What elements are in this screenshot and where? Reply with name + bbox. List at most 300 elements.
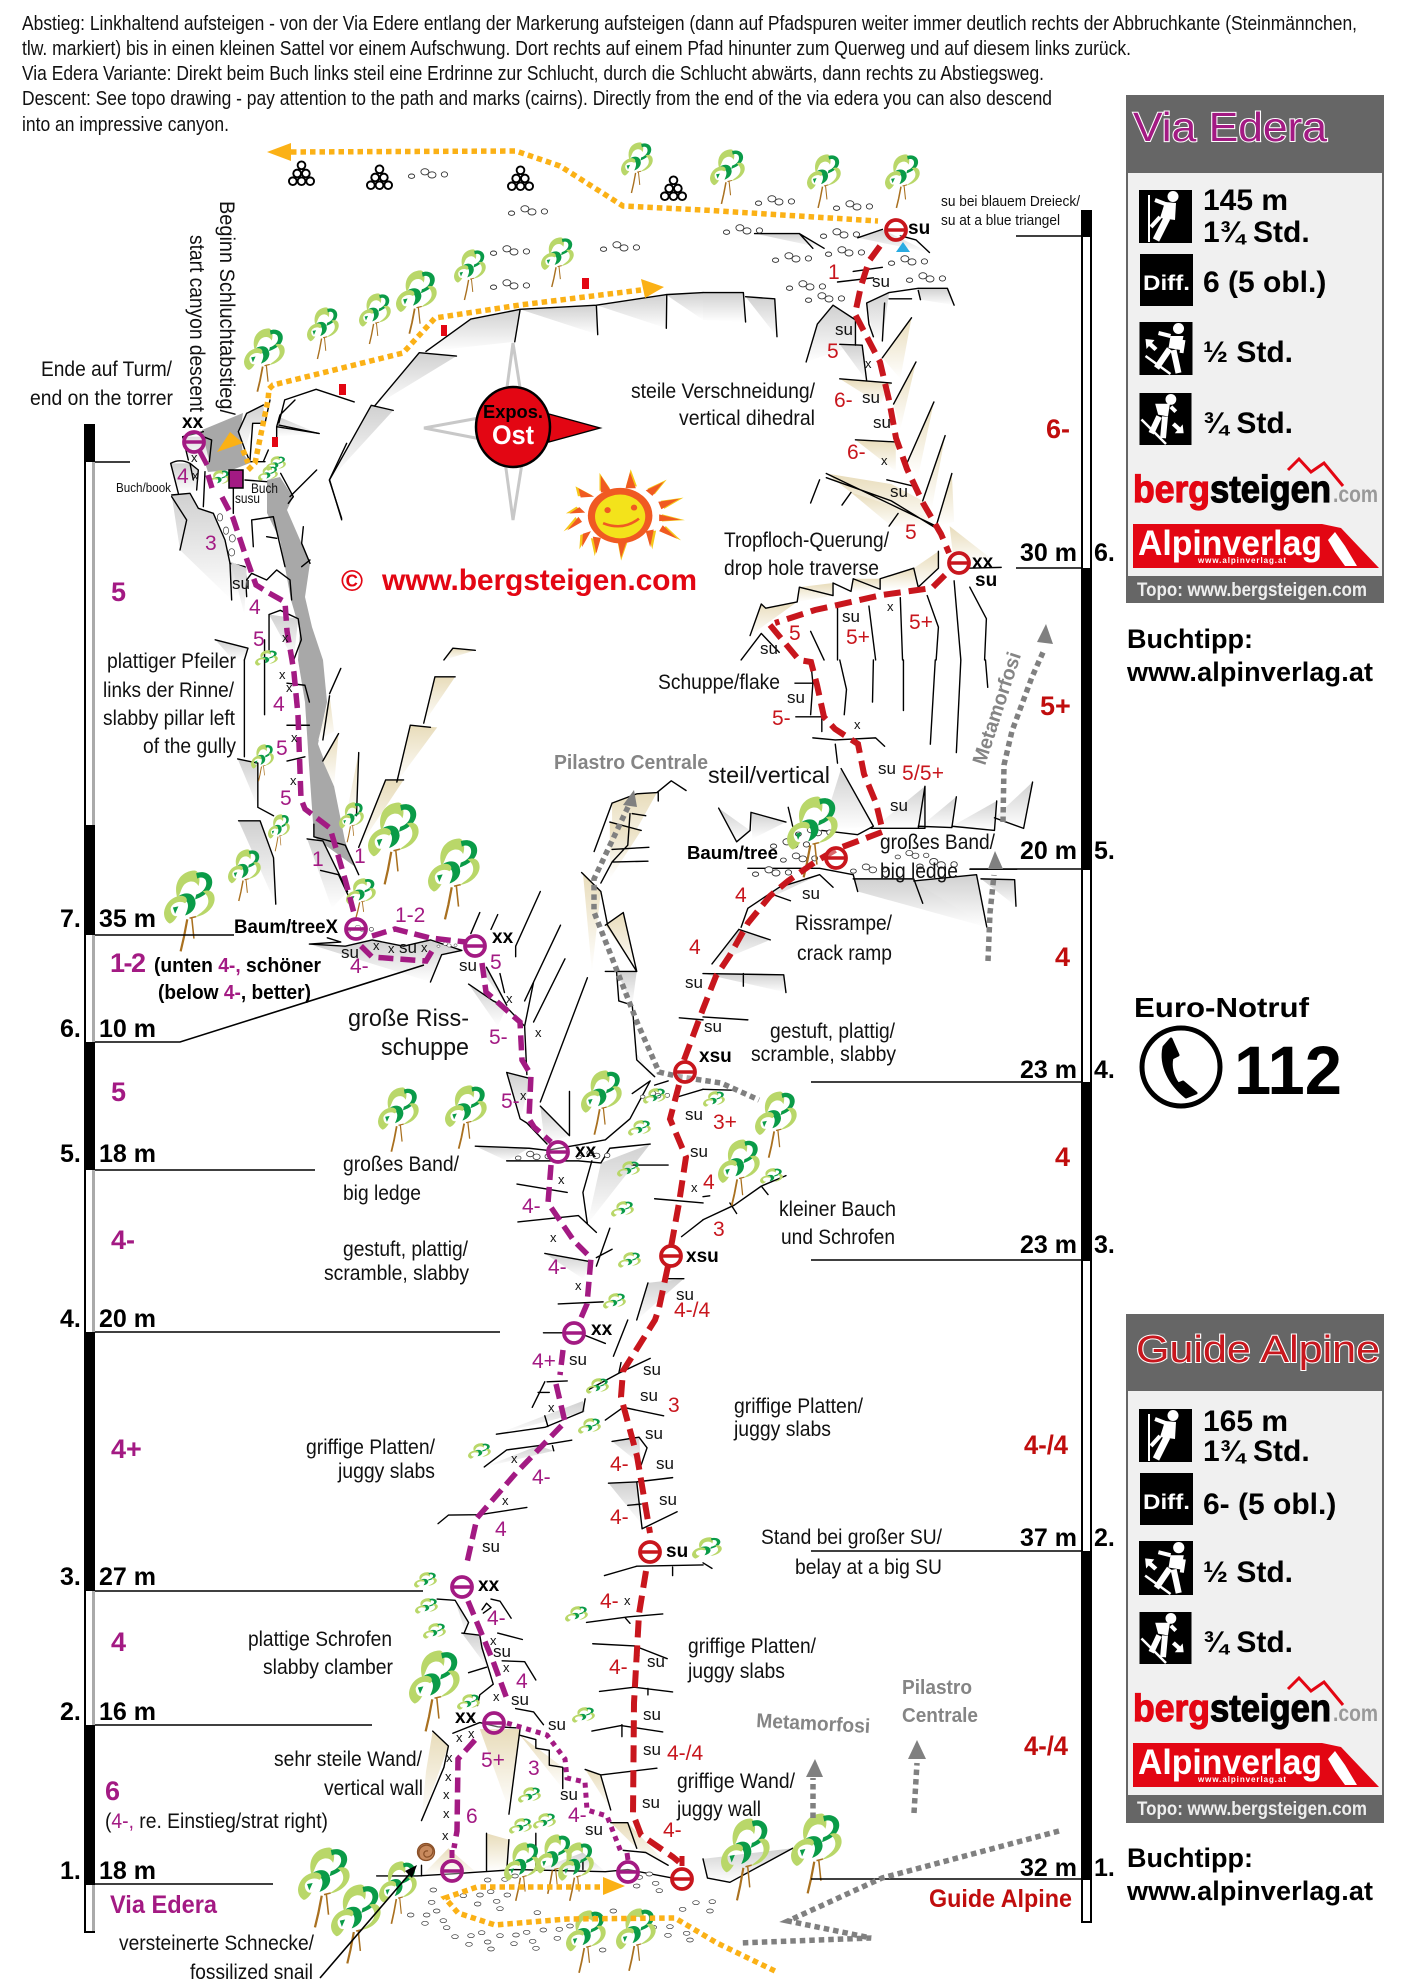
bold annotations: xx	[492, 927, 514, 948]
grade labels on route: Guide Alpine: 3	[668, 1394, 680, 1417]
su and bolt labels: x	[388, 941, 395, 956]
description labels: scramble, slabby	[324, 1262, 469, 1285]
right scale: pitch grades: 4-/4	[1024, 1731, 1068, 1761]
description labels: end on the torrer	[30, 387, 173, 410]
su and bolt labels: su	[643, 1740, 661, 1759]
grade labels on route: Via Edera	[177, 465, 587, 1828]
su and bolt labels: su	[685, 973, 703, 992]
su and bolt labels: su	[482, 1537, 500, 1556]
grade labels on route: Guide Alpine	[600, 261, 944, 1842]
grade labels on route: Via Edera: 3	[205, 532, 217, 555]
logo: Alpinverlag: Alpinverlag	[1138, 524, 1322, 563]
su and bolt labels: su	[890, 796, 908, 815]
grey neighbouring route names: Metamorfosi	[756, 1710, 871, 1738]
bold annotations: su	[975, 570, 997, 591]
su and bolt labels: x	[442, 1828, 449, 1843]
icon: difficulty	[1140, 1473, 1193, 1525]
difficulty value: 6 (5 obl.)	[1203, 266, 1326, 299]
icon: climbing	[1139, 190, 1192, 243]
su and bolt labels: x	[421, 940, 428, 955]
left scale: pitch grades: 5	[111, 577, 126, 607]
small bushes	[208, 456, 783, 1834]
description labels: große Riss-	[348, 1005, 469, 1032]
bold annotations: xx	[972, 552, 994, 573]
grade labels on route: Via Edera: 4	[249, 596, 261, 619]
rock drawing: upper left	[215, 293, 703, 660]
su and bolt labels: x	[520, 1088, 527, 1103]
vertical descent label: start canyon descent	[185, 235, 208, 412]
bold annotations: Baum/tree	[687, 843, 778, 863]
su and bolt labels	[191, 272, 908, 1843]
su and bolt labels: x	[502, 1493, 509, 1508]
length and climbing time: 145 m	[1203, 184, 1288, 217]
description labels: steil/vertical	[708, 762, 830, 788]
right scale: pitch lengths and numbers: 3.	[1094, 1231, 1115, 1259]
su and bolt labels: su	[760, 639, 778, 658]
left scale: pitch grades: 4+	[111, 1434, 142, 1464]
grade labels on route: Guide Alpine: 5-	[772, 707, 791, 730]
description labels: scramble, slabby	[751, 1043, 896, 1066]
bold annotations: xx	[182, 412, 204, 433]
su and bolt labels: su	[560, 1785, 578, 1804]
left scale: pitch numbers and lengths: 18 m	[99, 1857, 156, 1885]
logo: bergsteigen.com: berg	[1133, 1688, 1210, 1730]
copyright line: ©	[341, 565, 363, 598]
bold annotations: xx	[575, 1141, 597, 1162]
grade labels on route: Guide Alpine: 4	[689, 936, 701, 959]
icon: difficulty: Diff.	[1143, 1491, 1190, 1514]
bold annotations: xsu	[699, 1046, 732, 1067]
left scale: pitch grades: 1-2	[110, 948, 146, 978]
difficulty value: 6- (5 obl.)	[1203, 1488, 1336, 1521]
description labels: steile Verschneidung/	[631, 380, 815, 403]
logo: bergsteigen.com: .com	[1333, 1700, 1378, 1726]
left scale: pitch numbers and lengths: 10 m	[99, 1015, 156, 1043]
grade labels on route: Guide Alpine: 4-	[609, 1656, 628, 1679]
bold annotations: su	[666, 1541, 688, 1562]
description labels: plattige Schrofen	[248, 1628, 392, 1651]
description labels: gestuft, plattig/	[770, 1020, 895, 1043]
icon: difficulty	[1140, 254, 1193, 306]
icon: fossil snail with pointer arrow	[320, 1844, 434, 1978]
grade labels on route: Via Edera: 4-	[487, 1607, 506, 1630]
rotated grey route name: Metamorfosi	[969, 649, 1026, 768]
book tip: Via Edera panel	[1126, 624, 1373, 687]
panel: Guide Alpine facts	[1126, 1314, 1384, 1823]
grade labels on route: Via Edera: 4-	[532, 1466, 551, 1489]
su and bolt labels: x	[865, 356, 872, 371]
su and bolt labels: su	[659, 1490, 677, 1509]
su and bolt labels: su	[232, 574, 250, 593]
title: Guide Alpine: Guide Alpine	[1136, 1329, 1380, 1371]
grade labels on route: Via Edera: 4-	[522, 1195, 541, 1218]
length and climbing time: 1¾ Std.	[1203, 1435, 1310, 1468]
su and bolt labels: x	[881, 453, 888, 468]
left scale: pitch numbers and lengths: 18 m	[99, 1140, 156, 1168]
grey neighbouring route names	[554, 752, 978, 1738]
su and bolt labels: su	[890, 482, 908, 501]
su and bolt labels: x	[291, 730, 298, 745]
su and bolt labels: x	[290, 773, 297, 788]
logo: Alpinverlag: www.alpinverlag.at	[1197, 1775, 1286, 1784]
grade labels on route: Guide Alpine: 3	[713, 1218, 725, 1241]
description labels: vertical dihedral	[679, 407, 815, 430]
description labels: belay at a big SU	[795, 1556, 942, 1579]
description labels: juggy slabs	[733, 1418, 831, 1441]
grade labels on route: Via Edera: 5	[276, 737, 288, 760]
pebbles below the wall	[407, 1872, 716, 1952]
right scale: pitch grades: 4	[1055, 942, 1070, 972]
su and bolt labels: x	[446, 1750, 453, 1765]
grade labels on route: Via Edera: 1	[312, 848, 324, 871]
left scale: pitch numbers and lengths	[60, 905, 156, 1885]
logo: Alpinverlag: www.alpinverlag.at	[1197, 556, 1286, 565]
copyright line: www.bergsteigen.com	[381, 564, 697, 597]
right scale: pitch lengths and numbers: 37 m	[1020, 1524, 1077, 1552]
description labels: sehr steile Wand/	[274, 1748, 422, 1771]
su and bolt labels: su	[873, 413, 891, 432]
grade labels on route: Via Edera: 5	[253, 628, 265, 651]
red route markers	[272, 278, 589, 447]
grade labels on route: Via Edera: 5	[280, 787, 292, 810]
logo: bergsteigen.com: steigen	[1210, 469, 1331, 511]
su and bolt labels: su	[399, 938, 417, 957]
su and bolt labels: x	[456, 1730, 463, 1745]
left scale: pitch numbers and lengths: 7.	[60, 905, 81, 933]
trees	[164, 142, 920, 1973]
grade labels on route: Guide Alpine: 6-	[847, 441, 866, 464]
left scale: pitch numbers and lengths: 16 m	[99, 1698, 156, 1726]
su and bolt labels: su	[842, 607, 860, 626]
right scale: pitch lengths and numbers: 23 m	[1020, 1056, 1077, 1084]
right scale: pitch grades: 6-	[1046, 414, 1070, 444]
compass: exposition east: Ost	[492, 420, 534, 450]
description labels: griffige Platten/	[688, 1635, 816, 1658]
description labels: links der Rinne/	[103, 679, 234, 702]
su and bolt labels: x	[443, 1806, 450, 1821]
grade labels on route: Guide Alpine: 4-/4	[674, 1299, 711, 1322]
su and bolt labels: x	[192, 468, 199, 483]
su and bolt labels: su	[685, 1105, 703, 1124]
left scale: pitch grades: 4	[111, 1627, 126, 1657]
left pitch scale bar	[84, 424, 500, 1933]
right scale: pitch grades: 4-/4	[1024, 1430, 1068, 1460]
su and bolt labels: x	[373, 938, 380, 953]
grade labels on route: Via Edera: 4+	[532, 1350, 556, 1373]
icon: ascent on foot	[1140, 322, 1192, 375]
right scale: pitch lengths and numbers: 30 m	[1020, 539, 1077, 567]
left scale: pitch numbers and lengths: 20 m	[99, 1305, 156, 1333]
grade labels on route: Guide Alpine: 5	[905, 521, 917, 544]
route line: Via Edera	[199, 450, 628, 1860]
description labels: slabby pillar left	[103, 707, 235, 730]
su and bolt labels: x	[503, 1660, 510, 1675]
bold annotations: Baum/treeX	[234, 917, 338, 938]
description labels: su at a blue triangel	[941, 212, 1060, 229]
description labels: griffige Wand/	[677, 1770, 795, 1793]
grade labels on route: Via Edera: 4	[495, 1518, 507, 1541]
book tip: Guide Alpine panel: Buchtipp:	[1127, 1843, 1253, 1873]
su and bolt labels: x	[443, 1787, 450, 1802]
su and bolt labels: x	[506, 991, 513, 1006]
su and bolt labels: x	[548, 1400, 555, 1415]
left scale: pitch numbers and lengths: 2.	[60, 1698, 81, 1726]
grade labels on route: Guide Alpine: 4-/4	[667, 1742, 704, 1765]
rock drawing: upper right	[703, 229, 1001, 660]
icon: blue triangle at start	[896, 242, 910, 252]
description labels: schuppe	[381, 1034, 469, 1061]
description labels: big ledge	[343, 1182, 421, 1205]
su and bolt labels: x	[445, 1769, 452, 1784]
cairns	[289, 161, 686, 200]
descent description text: into an impressive canyon.	[22, 114, 229, 136]
grade labels on route: Guide Alpine: 5+	[846, 626, 870, 649]
description labels: susu	[235, 490, 260, 506]
su and bolt labels: x	[490, 1633, 497, 1648]
descent time: ¾ Std.	[1203, 407, 1293, 440]
grade labels on route: Guide Alpine: 3+	[713, 1111, 737, 1134]
su and bolt labels: x	[286, 680, 293, 695]
rock gully	[202, 413, 354, 866]
left scale: pitch grades: 4-	[111, 1225, 135, 1255]
left scale: pitch numbers and lengths: 3.	[60, 1563, 81, 1591]
icon: ascent on foot	[1139, 1541, 1193, 1595]
rock drawing: lower right	[703, 1563, 793, 1882]
logo: bergsteigen.com: .com	[1333, 481, 1378, 507]
icon: descent on foot	[1140, 1612, 1192, 1664]
logo: Alpinverlag	[1133, 1743, 1379, 1787]
su and bolt labels: x	[282, 630, 289, 645]
description labels: Ende auf Turm/	[41, 358, 172, 381]
grade labels on route: Via Edera: 4	[273, 693, 285, 716]
su and bolt labels: su	[656, 1454, 674, 1473]
right pitch scale bar	[811, 210, 1092, 1923]
grade labels on route: Via Edera: 4-	[548, 1256, 567, 1279]
descent description text: tlw. markiert) bis in einen kleinen Sattel vor einem Aufschwung. Dort rechts auf einem Pfad hinunter zum Querweg und auf diesem links zurück.	[22, 38, 1131, 60]
length and climbing time: 1¾ Std.	[1203, 216, 1310, 249]
bold annotations: xx	[478, 1575, 500, 1596]
descent time: ¾ Std.	[1203, 1626, 1293, 1659]
left scale: pitch grades: 5	[111, 1077, 126, 1107]
compass: exposition east: Expos.	[483, 402, 543, 422]
neighbouring routes, grey dotted	[594, 624, 1059, 1943]
length and climbing time	[1203, 1405, 1310, 1468]
su and bolt labels: su	[341, 943, 359, 962]
left scale: pitch grades: 6	[105, 1776, 120, 1806]
right scale: pitch grades: 5+	[1040, 691, 1071, 721]
rock drawing: middle right	[703, 660, 1033, 1220]
description labels: griffige Platten/	[734, 1395, 863, 1418]
su and bolt labels: su	[690, 1142, 708, 1161]
su and bolt labels: su	[642, 1793, 660, 1812]
description labels: of the gully	[143, 735, 236, 758]
bold annotations: (below 4-, better)	[158, 982, 311, 1004]
su and bolt labels: x	[854, 717, 861, 732]
bold annotations: (unten 4-, schöner	[154, 955, 321, 977]
book tip: Guide Alpine panel: www.alpinverlag.at	[1126, 1876, 1373, 1906]
topo credit: Topo: www.bergsteigen.com	[1137, 1799, 1367, 1820]
logo: bergsteigen.com	[1133, 1678, 1378, 1730]
description labels: Buch/book	[116, 480, 171, 495]
left scale: pitch numbers and lengths: 35 m	[99, 905, 156, 933]
grade labels on route: Via Edera: 5+	[481, 1749, 505, 1772]
euro emergency call	[1134, 992, 1342, 1109]
logo: bergsteigen.com	[1133, 459, 1378, 511]
grade labels on route: Guide Alpine: 4-	[610, 1506, 629, 1529]
grade labels on route: Via Edera: 4	[177, 465, 189, 488]
su and bolt labels: x	[887, 599, 894, 614]
description labels: big ledge	[880, 860, 958, 883]
description labels: griffige Platten/	[306, 1436, 435, 1459]
icon: summit book	[229, 470, 243, 488]
icon: difficulty: Diff.	[1143, 272, 1190, 295]
su and bolt labels: su	[643, 1705, 661, 1724]
su and bolt labels: su	[645, 1424, 663, 1443]
su and bolt labels: su	[640, 1386, 658, 1405]
length and climbing time: 165 m	[1203, 1405, 1288, 1438]
scree pebbles	[346, 169, 957, 1160]
grade labels on route: Guide Alpine: 5+	[909, 611, 933, 634]
book tip: Via Edera panel: www.alpinverlag.at	[1126, 657, 1373, 687]
right scale: pitch lengths and numbers: 23 m	[1020, 1231, 1077, 1259]
approach time: ½ Std.	[1203, 1556, 1293, 1589]
topo credit: Topo: www.bergsteigen.com	[1137, 580, 1367, 601]
description labels: juggy slabs	[337, 1460, 435, 1483]
grade labels on route: Guide Alpine: 4	[735, 884, 747, 907]
grade labels on route: Guide Alpine: 4	[703, 1171, 715, 1194]
su and bolt labels: su	[802, 884, 820, 903]
description labels: großes Band/	[880, 831, 995, 854]
description labels: slabby clamber	[263, 1656, 393, 1679]
su and bolt labels: su	[643, 1360, 661, 1379]
su and bolt labels: x	[624, 1593, 631, 1608]
su and bolt labels: su	[569, 1350, 587, 1369]
descent description text	[22, 13, 1357, 136]
su and bolt labels: su	[493, 1642, 511, 1661]
grade labels on route: Via Edera: 4	[516, 1670, 528, 1693]
su and bolt labels: x	[550, 1230, 557, 1245]
left scale: pitch grades	[105, 577, 218, 1919]
grade labels on route: Via Edera: 5-	[489, 1026, 508, 1049]
icon: climbing	[1139, 1409, 1192, 1462]
left scale: pitch numbers and lengths: 6.	[60, 1015, 81, 1043]
right scale: pitch lengths and numbers: 1.	[1094, 1854, 1115, 1882]
left scale: pitch numbers and lengths: 5.	[60, 1140, 81, 1168]
description labels: großes Band/	[343, 1153, 459, 1176]
right scale: pitch lengths and numbers: 6.	[1094, 539, 1115, 567]
description labels: drop hole traverse	[724, 557, 879, 580]
grade labels on route: Guide Alpine: 6-	[834, 389, 853, 412]
description labels: vertical wall	[324, 1777, 423, 1800]
su and bolt labels: su	[548, 1715, 566, 1734]
rock drawing: lower left	[377, 1320, 703, 1878]
description labels: gestuft, plattig/	[343, 1238, 468, 1261]
title: Via Edera: Via Edera	[1133, 104, 1327, 150]
su and bolt labels: su	[676, 1285, 694, 1304]
su and bolt labels: su	[787, 688, 805, 707]
su and bolt labels: su	[647, 1652, 665, 1671]
left scale: pitch numbers and lengths: 4.	[60, 1305, 81, 1333]
belay stations	[184, 220, 969, 1889]
grade labels on route: Guide Alpine: 1	[828, 261, 840, 284]
right scale: pitch grades: 4	[1055, 1142, 1070, 1172]
su and bolt labels: x	[279, 667, 286, 682]
description labels: juggy slabs	[687, 1660, 785, 1683]
su and bolt labels: su	[704, 1017, 722, 1036]
su and bolt labels: x	[691, 1180, 698, 1195]
grade labels on route: Via Edera: 4-	[568, 1804, 587, 1827]
su and bolt labels: x	[575, 1278, 582, 1293]
su and bolt labels: su	[585, 1820, 603, 1839]
su and bolt labels: su	[835, 320, 853, 339]
su and bolt labels: su	[878, 759, 896, 778]
description labels: versteinerte Schnecke/	[119, 1932, 314, 1955]
description labels: su bei blauem Dreieck/	[941, 193, 1081, 210]
right scale: pitch grades: Guide Alpine	[929, 1885, 1072, 1913]
description labels: kleiner Bauch	[779, 1198, 896, 1221]
right scale: pitch lengths and numbers: 2.	[1094, 1524, 1115, 1552]
description labels: Rissrampe/	[795, 912, 892, 935]
right scale: pitch lengths and numbers: 20 m	[1020, 837, 1077, 865]
euro emergency call: Euro-Notruf	[1134, 992, 1310, 1023]
panel: Via Edera facts	[1126, 95, 1384, 603]
su and bolt labels: x	[493, 1689, 500, 1704]
grey neighbouring route names: Pilastro	[902, 1677, 972, 1699]
description labels: und Schrofen	[781, 1226, 895, 1249]
bold annotations: xsu	[686, 1246, 719, 1267]
grade labels on route: Via Edera: 5-	[501, 1090, 520, 1113]
description labels: (4-, re. Einstieg/strat right)	[105, 1810, 328, 1833]
descent description text: Via Edera Variante: Direkt beim Buch links steil eine Erdrinne zur Schlucht, durch die Schlucht abwärts, dann rechts zu Abstiegsweg.	[22, 63, 1044, 85]
left scale: pitch numbers and lengths: 1.	[60, 1857, 81, 1885]
logo: bergsteigen.com: steigen	[1210, 1688, 1331, 1730]
description labels: fossilized snail	[190, 1961, 313, 1984]
left scale: pitch numbers and lengths: 27 m	[99, 1563, 156, 1591]
icon: smiling sun	[564, 469, 685, 561]
bold annotations: su	[908, 218, 930, 239]
approach and descent paths, orange	[217, 143, 878, 1971]
description labels	[30, 193, 1081, 1984]
description labels: Buch	[251, 480, 278, 496]
grade labels on route: Guide Alpine: 4-	[600, 1590, 619, 1613]
approach time: ½ Std.	[1203, 336, 1293, 369]
left scale: pitch grades: Via Edera	[110, 1891, 218, 1919]
grade labels on route: Guide Alpine: 4-	[610, 1453, 629, 1476]
grade labels on route: Via Edera: 6	[466, 1805, 478, 1828]
description labels: plattiger Pfeiler	[107, 650, 236, 673]
right scale: pitch lengths and numbers: 5.	[1094, 837, 1115, 865]
bold annotations: xx	[591, 1319, 613, 1340]
bold annotations	[154, 218, 997, 1728]
description labels: Tropfloch-Querung/	[724, 529, 889, 552]
euro emergency call: 112	[1234, 1032, 1342, 1109]
right scale: pitch grades	[929, 414, 1072, 1913]
su and bolt labels: su	[459, 956, 477, 975]
rock drawing: middle left	[238, 660, 703, 1320]
descent description text: Descent: See topo drawing - pay attention to the path and marks (cairns). Directly from the end of the via edera you can also descend	[22, 88, 1052, 110]
grade labels on route: Guide Alpine: 5	[827, 340, 839, 363]
description labels: juggy wall	[676, 1798, 761, 1821]
vertical descent label	[185, 201, 238, 415]
logo: Alpinverlag	[1133, 524, 1379, 568]
icon: descent on foot	[1140, 393, 1192, 445]
rock drawing: summit tower	[171, 400, 347, 600]
grade labels on route: Via Edera: 1	[354, 845, 366, 868]
compass: exposition east	[424, 343, 600, 520]
grade labels on route: Via Edera: 5	[490, 951, 502, 974]
bold annotations: xx	[455, 1707, 477, 1728]
grade labels on route: Via Edera: 1-2	[395, 904, 425, 927]
